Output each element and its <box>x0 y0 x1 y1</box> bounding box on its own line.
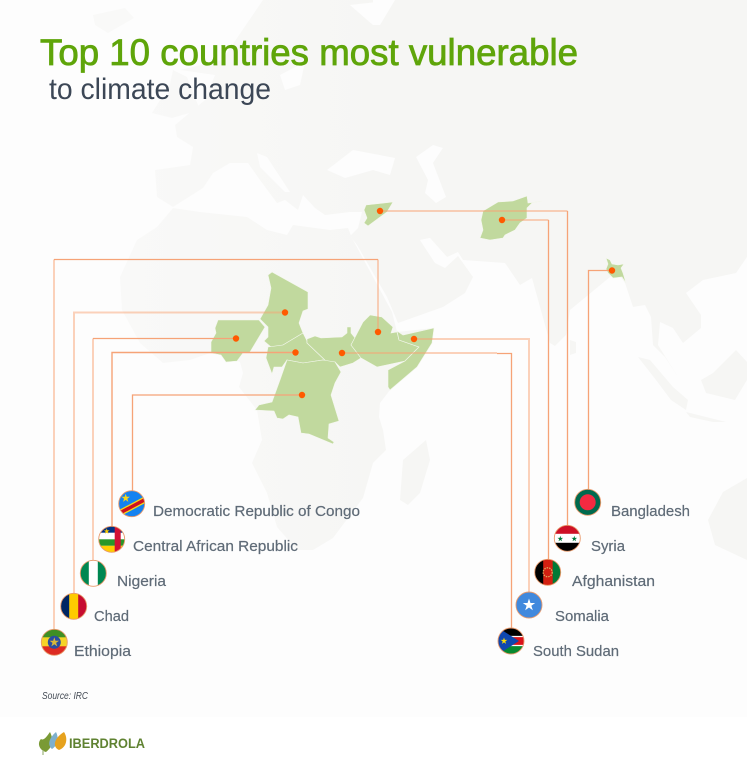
footer band <box>0 717 747 765</box>
highlighted countries <box>211 196 626 444</box>
connector: Syria <box>380 211 568 525</box>
label: Syria: Syria <box>591 538 626 555</box>
icon: leaves <box>39 732 66 755</box>
country: Nigeria <box>211 320 265 362</box>
label: Central African Republic: Central African Republic <box>133 538 299 555</box>
connector: Nigeria <box>93 338 236 560</box>
flag: South Sudan <box>497 627 525 656</box>
flag: Chad <box>60 592 88 620</box>
flag: Somalia <box>515 591 543 619</box>
connector: Bangladesh <box>588 270 612 489</box>
flag: Central African Republic <box>98 525 126 553</box>
flag: Bangladesh <box>574 488 602 516</box>
country: Chad <box>260 272 308 347</box>
country: Ethiopia <box>351 315 419 367</box>
label: Democratic Republic of Congo: Democratic Republic of Congo <box>153 503 360 520</box>
country: South Sudan <box>307 327 361 367</box>
flag: Democratic Republic of Congo <box>118 490 146 518</box>
label: Bangladesh: Bangladesh <box>611 503 690 520</box>
connector: Democratic Republic of Congo <box>132 395 302 491</box>
country: Somalia <box>388 328 434 390</box>
country: Democratic Republic of Congo <box>255 360 341 444</box>
label: South Sudan: South Sudan <box>533 643 619 660</box>
wordmark: IBERDROLA <box>69 736 145 751</box>
label: Somalia: Somalia <box>555 608 610 625</box>
country: Bangladesh <box>606 258 626 283</box>
background world map <box>93 0 747 560</box>
country: Central African Republic <box>266 333 328 374</box>
connector: South Sudan <box>342 353 512 628</box>
flag: Ethiopia <box>40 628 68 656</box>
connector: Somalia <box>414 339 529 592</box>
source note: Source: IRC <box>42 691 89 702</box>
label: Nigeria: Nigeria <box>117 573 167 590</box>
subtitle: to climate change <box>49 73 271 106</box>
flag: Syria <box>553 524 581 553</box>
logo: Iberdrola <box>39 732 145 755</box>
connector: Afghanistan <box>502 220 548 559</box>
location dots <box>233 208 615 398</box>
country: Syria <box>364 202 393 226</box>
title: Top 10 countries most vulnerable <box>40 32 578 73</box>
country: Afghanistan <box>480 196 542 240</box>
connector: Ethiopia <box>54 260 378 630</box>
flag: Nigeria <box>79 559 107 587</box>
label: Ethiopia: Ethiopia <box>74 643 132 660</box>
connector: Chad <box>74 312 285 593</box>
flag: Afghanistan <box>534 558 562 586</box>
label: Chad: Chad <box>94 608 129 625</box>
label: Afghanistan: Afghanistan <box>572 573 655 590</box>
connector: Central African Republic <box>112 352 295 526</box>
